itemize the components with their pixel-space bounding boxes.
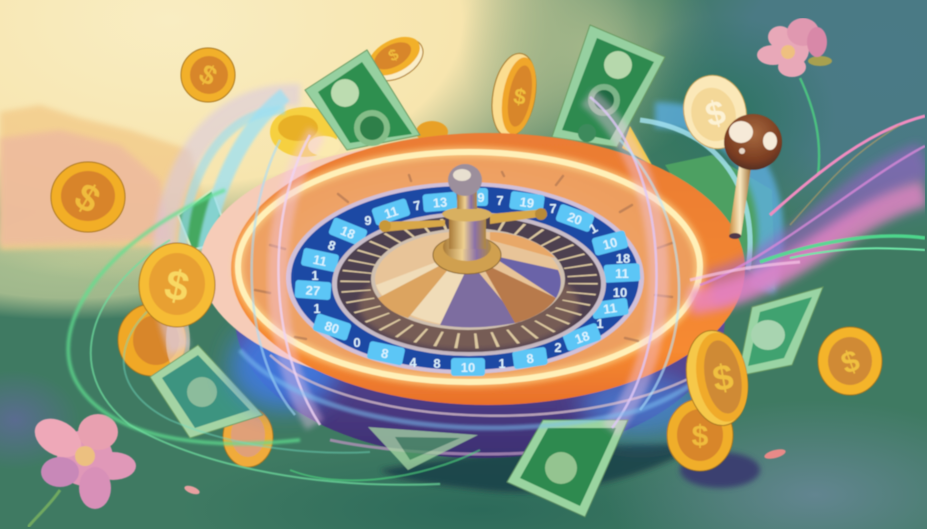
wheel numbers: 18 [573,328,592,347]
wheel numbers: 11 [615,266,629,281]
wheel numbers: 1 [498,356,506,371]
banknote: left behind wheel [178,190,230,250]
wheel numbers: 1 [311,268,319,283]
wheel: central cone [371,228,565,330]
lever knob [724,114,782,170]
wheel numbers: 10 [613,285,627,300]
wheel: centre spindle [379,164,547,274]
coin: yellow behind wheel right [622,126,652,165]
wheel numbers: 7 [549,201,557,216]
coin: upper right pale: $ [701,93,730,135]
wheel numbers: 19 [519,194,535,211]
banknote: bottom centre [368,427,478,470]
banknote: right lower [738,287,823,376]
wheel numbers: 18 [338,223,357,242]
wheel: pocket ring [332,212,606,356]
swirl: rear energy arcs [163,95,771,350]
wheel: pale outer edge [200,143,680,387]
coin: top left: $ [194,58,222,92]
wheel numbers: 8 [380,345,390,362]
coin: large left front [139,243,215,327]
wheel: orange rim [231,133,745,405]
wheel numbers: 7 [412,197,422,214]
wheel: base [230,178,725,458]
coin: left [51,162,125,232]
wheel numbers: 11 [602,300,618,317]
coin: under wheel [500,420,540,456]
coin: behind wheel top [416,121,448,143]
coin: lower left behind note [223,407,273,467]
banknote: upper right [552,25,665,147]
banknote: upper left [305,50,420,150]
wheel numbers: 11 [312,252,328,269]
coin: right edge-on [679,326,755,430]
coin: left: $ [67,175,107,222]
coin: top left [181,48,235,102]
petals: drifting [183,447,787,496]
coin: top edge-on: $ [512,83,528,110]
banknote: bottom right [507,420,628,517]
coin: behind left [118,304,190,376]
wheel numbers: 11 [382,203,400,222]
wheel numbers: 9 [477,190,485,205]
wheel numbers: 8 [525,351,535,366]
coin: far right [818,327,882,395]
wheel numbers [305,190,630,375]
coin: top tilted: $ [386,46,402,65]
coin: right edge-on: $ [710,356,736,399]
coin: large left front: $ [161,260,193,311]
swirl: front energy rings [68,97,720,485]
flower: bottom left [28,411,136,527]
wheel numbers: 13 [432,194,448,211]
rainbow energy stream [690,116,925,302]
number cells [294,188,640,376]
coin: far right: $ [837,344,864,381]
wheel numbers: 8 [433,356,441,371]
lever stick [729,165,751,239]
wheel numbers: 4 [409,355,417,370]
flower: top right [757,18,832,175]
wheel: glowing ring [238,152,700,382]
wheel numbers: 1 [596,316,604,331]
wheel numbers: 1 [586,220,600,237]
coin: top edge-on [486,50,542,140]
wheel numbers: 20 [565,209,584,228]
banknote: right behind wheel [665,155,775,290]
wheel numbers: 10 [461,360,475,375]
wheel numbers: 0 [353,335,361,350]
wheel numbers: 18 [616,251,630,266]
coin: lower right [667,399,733,471]
wheel numbers: 80 [323,318,341,337]
wheel numbers: 7 [496,193,504,208]
wheel numbers: 2 [554,340,562,355]
wheel: rim ticks [255,172,672,341]
coin: top tilted [361,28,430,89]
wheel: number track [286,182,644,376]
pocket dividers [355,225,583,341]
wheel numbers: 27 [305,283,321,298]
coin: upper right pale [675,68,755,156]
coin: lower right: $ [692,420,709,453]
coin: behind wheel upper left [270,107,340,157]
wheel numbers: 8 [326,237,338,254]
wheel numbers: 10 [601,234,619,253]
wheel numbers: 1 [313,301,321,316]
wheel numbers: 9 [364,213,372,228]
wheel: inner bowl [238,152,700,382]
wheel: ground shadow [380,444,700,493]
banknote: lower left [150,345,263,438]
